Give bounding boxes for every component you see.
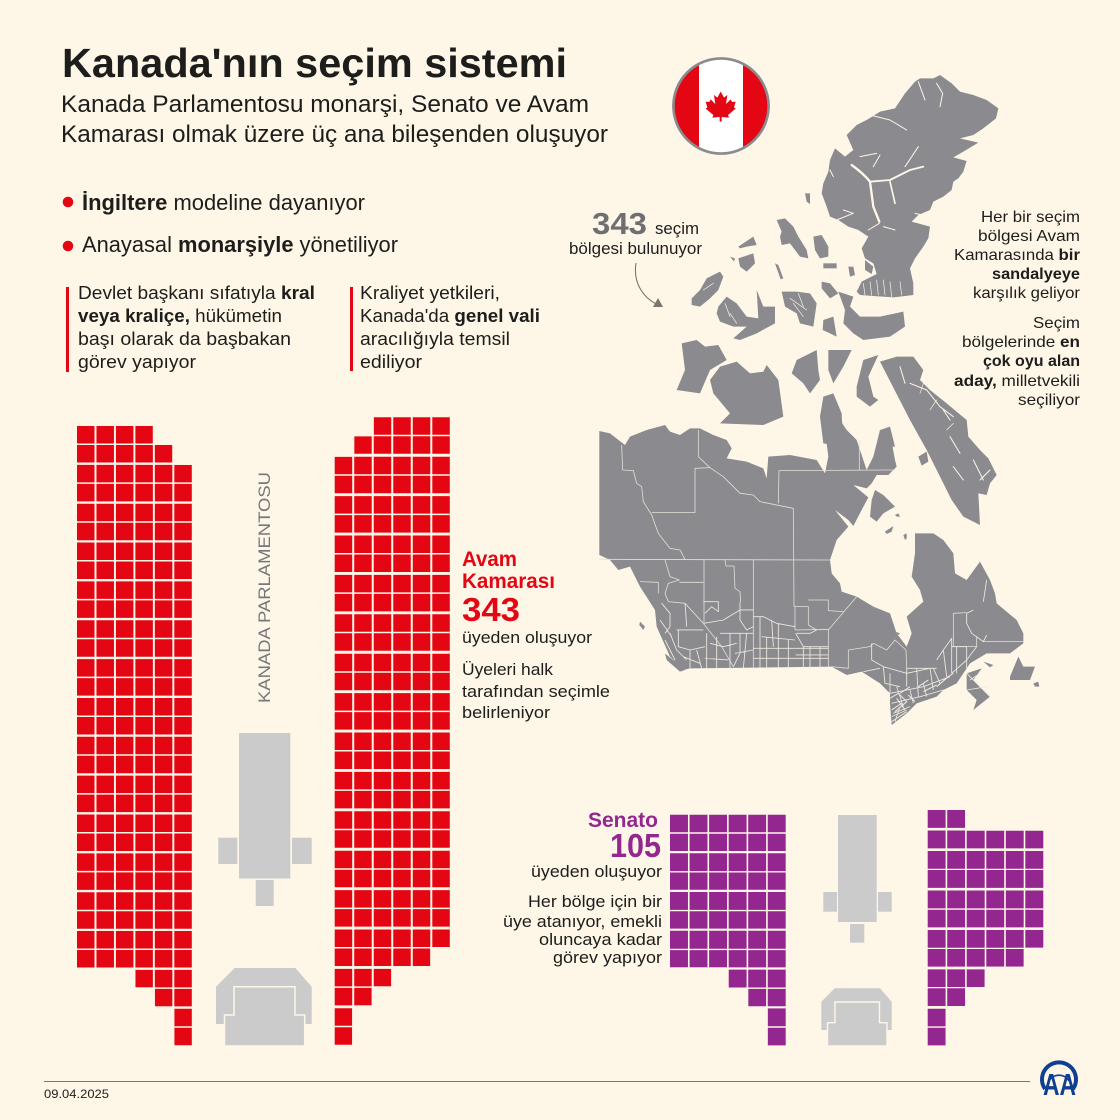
- map annotation: 343 districts: 343: [592, 206, 647, 241]
- icon: senate table: [823, 815, 892, 943]
- text block: House of Commons: [462, 548, 610, 722]
- icon: maple leaf: [706, 92, 736, 122]
- arrow to map: [635, 263, 663, 307]
- text block: Senate: üye atanıyor, emekli: [503, 912, 662, 931]
- electoral district borders: [599, 430, 1023, 668]
- chart: Senate left seats: [665, 810, 790, 1050]
- map note: election: Seçim: [1033, 315, 1080, 332]
- text block: head of state: görev yapıyor: [78, 351, 196, 372]
- text block: governor general: aracılığıyla temsil: [360, 328, 510, 349]
- footer line: [44, 1081, 1030, 1082]
- map note: seats: bölgesi Avam: [978, 228, 1080, 245]
- chart: House of Commons left seats: [70, 420, 200, 1050]
- chart: Senate right seats: [920, 805, 1050, 1050]
- map annotation: 343 districts: [569, 206, 703, 258]
- chart: House of Commons right seats: [330, 410, 455, 1050]
- map of Canada: [599, 75, 1039, 725]
- text block: House of Commons: Kamarası: [462, 570, 555, 593]
- text block: Senate: Senato: [588, 809, 658, 832]
- text block: House of Commons: belirleniyor: [462, 703, 550, 722]
- map annotation: 343 districts: seçim: [655, 220, 699, 238]
- text block: House of Commons: üyeden oluşuyor: [462, 628, 592, 647]
- fjords and channels: [703, 82, 990, 480]
- icon: speaker chair: [216, 968, 312, 1046]
- map note: seats: sandalyeye: [992, 266, 1080, 283]
- title: Kanada'nın seçim sistemi: [62, 40, 567, 86]
- subtitle: Kamarası olmak üzere üç ana bileşenden oluşuyor: [61, 121, 608, 148]
- map note: election: aday, milletvekili: [954, 373, 1080, 390]
- subtitle: [61, 91, 608, 148]
- text block: House of Commons: Avam: [462, 548, 517, 571]
- map note: election: seçiliyor: [1018, 392, 1081, 409]
- map note: election: bölgelerinde en: [962, 334, 1080, 351]
- map note: seats: Kamarasında bir: [954, 247, 1080, 264]
- text block: governor general: ediliyor: [360, 351, 422, 372]
- bullet: model: İngiltere modeline dayanıyor: [82, 190, 365, 215]
- bullet: monarchy: Anayasal monarşiyle yönetiliyor: [82, 232, 398, 257]
- map annotation: 343 districts: bölgesi bulunuyor: [569, 240, 703, 258]
- map note: seats: Her bir seçim: [981, 209, 1080, 226]
- subtitle: Kanada Parlamentosu monarşi, Senato ve Avam: [61, 91, 589, 118]
- text block: Senate: üyeden oluşuyor: [531, 862, 662, 881]
- text block: Senate: Her bölge için bir: [528, 892, 662, 911]
- vertical label: KANADA PARLAMENTOSU: [255, 472, 274, 703]
- text block: Senate: [503, 809, 662, 967]
- text block: Senate: oluncaya kadar: [539, 930, 662, 949]
- text block: head of state: [66, 282, 315, 372]
- text block: head of state: veya kraliçe, hükümetin: [78, 305, 282, 326]
- mainland: [599, 420, 1023, 725]
- text block: House of Commons: Üyeleri halk: [462, 660, 554, 679]
- text block: head of state: başı olarak da başbakan: [78, 328, 291, 349]
- text block: governor general: Kanada'da genel vali: [360, 305, 540, 326]
- icon: AA logo: AA: [1043, 1067, 1076, 1102]
- icon: AA logo: [1042, 1062, 1076, 1102]
- text block: House of Commons: tarafından seçimle: [462, 682, 610, 701]
- text block: governor general: [350, 282, 540, 372]
- map note: seats: [954, 209, 1081, 302]
- map note: election: çok oyu alan: [983, 353, 1080, 370]
- date: 09.04.2025: [44, 1087, 109, 1101]
- icon: commons table: [218, 733, 312, 906]
- text block: head of state: Devlet başkanı sıfatıyla kral: [78, 282, 315, 303]
- text block: Senate: görev yapıyor: [553, 948, 662, 967]
- text block: House of Commons: 343: [462, 591, 520, 628]
- map note: seats: karşılık geliyor: [973, 285, 1081, 302]
- text block: governor general: Kraliyet yetkileri,: [360, 282, 500, 303]
- flag of Canada: [672, 57, 770, 155]
- map note: election: [954, 315, 1081, 409]
- text block: Senate: 105: [610, 827, 661, 864]
- icon: senate chair: [821, 988, 892, 1046]
